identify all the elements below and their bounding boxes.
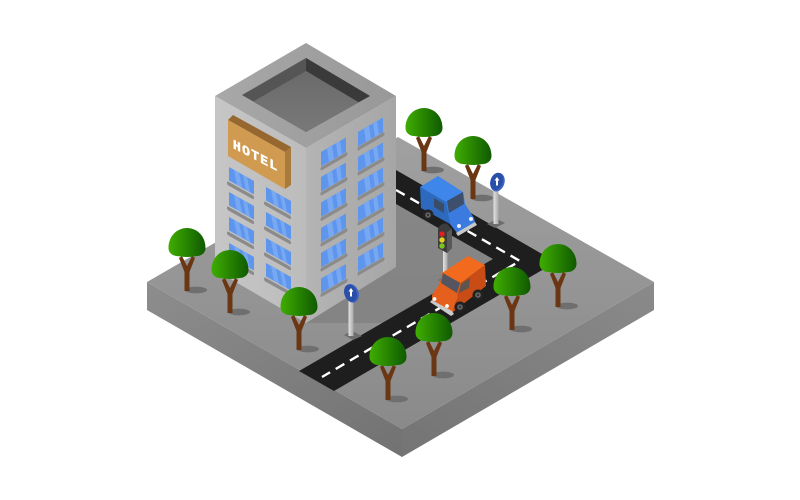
tree: lower right (416, 313, 454, 378)
tree: front (370, 337, 408, 402)
isometric hotel street scene (147, 43, 654, 457)
traffic light (438, 224, 454, 285)
windows: left wall (227, 166, 291, 296)
sign text: HOTEL (233, 138, 278, 176)
hotel building (215, 43, 396, 323)
tree: far left (168, 228, 207, 293)
tree: back left (406, 108, 444, 173)
tree: right of road (494, 267, 532, 332)
left wall (215, 96, 306, 323)
tree: far right corner (540, 244, 578, 309)
roof (215, 43, 396, 148)
road sign: back (487, 171, 507, 228)
hotel sign (228, 115, 291, 189)
road centre dashes (322, 190, 520, 377)
tree: back right (454, 136, 493, 201)
right wall (306, 96, 396, 323)
road (299, 170, 556, 391)
road sign: front (342, 282, 362, 340)
tree: left (212, 250, 250, 315)
blue van (420, 176, 477, 236)
tree: building corner (280, 287, 319, 352)
orange van (430, 256, 486, 316)
windows: right wall (320, 117, 384, 298)
ground platform (147, 137, 654, 457)
building shadow (306, 200, 500, 323)
